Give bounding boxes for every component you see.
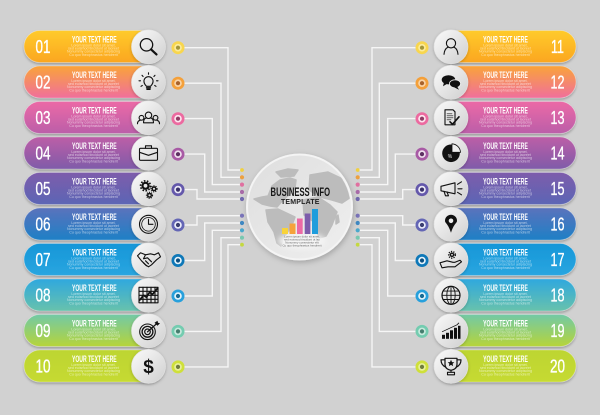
heading 13: YOUR TEXT HERE xyxy=(483,106,528,116)
body 08: Cu quo theophrastus hendrerit xyxy=(69,301,118,305)
body 20: Nonummy consectetur adipiscing xyxy=(479,369,532,373)
icon circle: trophy xyxy=(434,349,468,383)
dot 04 xyxy=(172,148,184,161)
heading 15: YOUR TEXT HERE xyxy=(483,177,528,187)
body 03: sed euismod tincidunt ut laoreet xyxy=(68,118,119,122)
body 05: Cu quo theophrastus hendrerit xyxy=(69,195,118,199)
body 18: sed euismod tincidunt ut laoreet xyxy=(480,295,531,299)
number 09: 09 xyxy=(36,321,50,341)
number 02: 02 xyxy=(36,73,50,93)
body 06: Nonummy consectetur adipiscing xyxy=(67,227,120,231)
icon circle: line chart xyxy=(132,278,166,312)
row 09 xyxy=(24,314,184,348)
number 01: 01 xyxy=(36,37,50,57)
heading 03: YOUR TEXT HERE xyxy=(72,106,117,116)
pill 20 xyxy=(436,350,576,382)
icon circle: dollar xyxy=(132,349,166,383)
body 14: sed euismod tincidunt ut laoreet xyxy=(480,153,531,157)
icon circle: person xyxy=(434,30,468,64)
body 10: Nonummy consectetur adipiscing xyxy=(67,369,120,373)
number 03: 03 xyxy=(36,108,50,128)
row 03 xyxy=(24,101,184,135)
icon circle: handshake xyxy=(132,243,166,277)
row 06 xyxy=(24,207,184,241)
row 18 xyxy=(416,278,576,312)
icon circle: target xyxy=(132,314,166,348)
body 19: Lorem ipsum dolor sit amet, xyxy=(483,327,528,331)
number 17: 17 xyxy=(550,250,564,270)
body 06: Cu quo theophrastus hendrerit xyxy=(69,230,118,234)
body 09: Nonummy consectetur adipiscing xyxy=(67,334,120,338)
body 05: Lorem ipsum dolor sit amet, xyxy=(71,185,116,189)
heading 12: YOUR TEXT HERE xyxy=(483,70,528,80)
body 13: sed euismod tincidunt ut laoreet xyxy=(480,118,531,122)
number 19: 19 xyxy=(550,321,564,341)
dot 10 xyxy=(172,360,184,373)
row 04 xyxy=(24,136,184,170)
body 15: Nonummy consectetur adipiscing xyxy=(479,192,532,196)
center caption: Lorem ipsum dolor sit amet, xyxy=(284,234,320,238)
number 12: 12 xyxy=(550,73,564,93)
body 16: sed euismod tincidunt ut laoreet xyxy=(480,224,531,228)
heading 04: YOUR TEXT HERE xyxy=(72,141,117,151)
pill 18 xyxy=(436,279,576,311)
dot 06 xyxy=(172,218,184,232)
dot 19 xyxy=(416,325,428,338)
dot 13 xyxy=(416,112,428,125)
body 17: Nonummy consectetur adipiscing xyxy=(479,263,532,267)
body 16: Nonummy consectetur adipiscing xyxy=(479,227,532,231)
number 05: 05 xyxy=(36,179,50,199)
heading 06: YOUR TEXT HERE xyxy=(72,212,117,222)
body 13: Nonummy consectetur adipiscing xyxy=(479,121,532,125)
pill 02 xyxy=(24,66,164,98)
row 12 xyxy=(416,65,576,99)
dot 09 xyxy=(172,325,184,338)
body 13: Cu quo theophrastus hendrerit xyxy=(481,124,530,128)
body 03: Nonummy consectetur adipiscing xyxy=(67,121,120,125)
pill 08 xyxy=(24,279,164,311)
body 15: Cu quo theophrastus hendrerit xyxy=(481,195,530,199)
body 19: sed euismod tincidunt ut laoreet xyxy=(480,330,531,334)
number 06: 06 xyxy=(36,215,50,235)
number 08: 08 xyxy=(36,286,50,306)
body 18: Lorem ipsum dolor sit amet, xyxy=(483,292,528,296)
subtitle: TEMPLATE xyxy=(281,199,320,206)
body 11: Nonummy consectetur adipiscing xyxy=(479,50,532,54)
pill 07 xyxy=(24,244,164,276)
row 05 xyxy=(24,172,184,206)
number 11: 11 xyxy=(551,37,564,57)
connector lines: left xyxy=(184,48,241,367)
center caption: Cu quo theophrastus hendrerit xyxy=(282,244,322,248)
body 06: sed euismod tincidunt ut laoreet xyxy=(68,224,119,228)
row 08 xyxy=(24,278,184,312)
pill 09 xyxy=(24,314,164,346)
heading 10: YOUR TEXT HERE xyxy=(72,354,117,364)
icon circle: pie chart: % xyxy=(448,154,453,160)
center caption: Nonummy consectetur elit xyxy=(285,240,319,244)
body 14: Cu quo theophrastus hendrerit xyxy=(481,159,530,163)
number 07: 07 xyxy=(36,250,50,270)
row 17 xyxy=(416,243,576,277)
row 16 xyxy=(416,207,576,241)
body 02: sed euismod tincidunt ut laoreet xyxy=(68,82,119,86)
body 15: sed euismod tincidunt ut laoreet xyxy=(480,188,531,192)
heading 11: YOUR TEXT HERE xyxy=(483,35,528,45)
row 14 xyxy=(416,136,576,170)
body 09: Cu quo theophrastus hendrerit xyxy=(69,337,118,341)
heading 14: YOUR TEXT HERE xyxy=(483,141,528,151)
body 01: Cu quo theophrastus hendrerit xyxy=(69,53,118,57)
dot 14 xyxy=(416,148,428,161)
heading 07: YOUR TEXT HERE xyxy=(72,248,117,258)
number 18: 18 xyxy=(550,286,564,306)
pill 05 xyxy=(24,172,164,204)
body 04: Lorem ipsum dolor sit amet, xyxy=(71,150,116,154)
number 20: 20 xyxy=(550,357,565,377)
number 15: 15 xyxy=(550,179,564,199)
body 18: Cu quo theophrastus hendrerit xyxy=(481,301,530,305)
title: BUSINESS INFO xyxy=(271,185,330,199)
heading 18: YOUR TEXT HERE xyxy=(483,283,528,293)
icon circle: globe xyxy=(434,278,468,312)
world map xyxy=(254,169,351,246)
heading 05: YOUR TEXT HERE xyxy=(72,177,117,187)
body 05: sed euismod tincidunt ut laoreet xyxy=(68,188,119,192)
body 07: sed euismod tincidunt ut laoreet xyxy=(68,260,119,264)
dot 02 xyxy=(172,77,184,90)
body 02: Lorem ipsum dolor sit amet, xyxy=(71,79,116,83)
body 02: Nonummy consectetur adipiscing xyxy=(67,85,120,89)
icon circle: dollar: $ xyxy=(143,357,154,378)
body 07: Lorem ipsum dolor sit amet, xyxy=(71,256,116,260)
body 06: Lorem ipsum dolor sit amet, xyxy=(71,221,116,225)
body 15: Lorem ipsum dolor sit amet, xyxy=(483,185,528,189)
pill 01 xyxy=(24,30,164,62)
heading 19: YOUR TEXT HERE xyxy=(483,319,528,329)
body 19: Nonummy consectetur adipiscing xyxy=(479,334,532,338)
center globe panel xyxy=(247,154,352,260)
connector lines: right xyxy=(359,48,416,367)
number 04: 04 xyxy=(36,144,50,164)
pill 11 xyxy=(436,30,576,62)
small junction dots: left xyxy=(240,168,244,247)
icon circle: gears xyxy=(132,172,166,206)
icon circle: hand with gear xyxy=(434,243,468,277)
body 05: Nonummy consectetur adipiscing xyxy=(67,192,120,196)
dot 11 xyxy=(416,41,428,54)
row 19 xyxy=(416,314,576,348)
body 09: Lorem ipsum dolor sit amet, xyxy=(71,327,116,331)
body 14: Lorem ipsum dolor sit amet, xyxy=(483,150,528,154)
row 20 xyxy=(416,349,576,383)
row 10 xyxy=(24,349,184,383)
body 03: Lorem ipsum dolor sit amet, xyxy=(71,114,116,118)
icon circle: speech bubbles xyxy=(434,65,468,99)
pill 14 xyxy=(436,137,576,169)
pill 13 xyxy=(436,102,576,134)
body 04: sed euismod tincidunt ut laoreet xyxy=(68,153,119,157)
body 12: sed euismod tincidunt ut laoreet xyxy=(480,82,531,86)
row 07 xyxy=(24,243,184,277)
dot 01 xyxy=(172,41,184,54)
pill 17 xyxy=(436,244,576,276)
dot 03 xyxy=(172,112,184,125)
body 04: Nonummy consectetur adipiscing xyxy=(67,156,120,160)
bar chart xyxy=(282,209,318,234)
icon circle: pie chart xyxy=(434,136,468,170)
body 10: Cu quo theophrastus hendrerit xyxy=(69,372,118,376)
pill 10 xyxy=(24,350,164,382)
body 09: sed euismod tincidunt ut laoreet xyxy=(68,330,119,334)
dot 18 xyxy=(416,290,428,302)
icon circle: clock xyxy=(132,207,166,241)
heading 20: YOUR TEXT HERE xyxy=(483,354,528,364)
caption backdrop xyxy=(278,233,326,249)
body 01: sed euismod tincidunt ut laoreet xyxy=(68,46,119,50)
number 10: 10 xyxy=(36,357,50,377)
icon circle: megaphone xyxy=(434,172,468,206)
center caption: sed euismod tincidunt ut lao xyxy=(284,238,320,242)
icon circle: map pin xyxy=(434,207,468,241)
pill 06 xyxy=(24,208,164,240)
dot 17 xyxy=(416,254,428,267)
dot 05 xyxy=(172,183,184,196)
body 20: sed euismod tincidunt ut laoreet xyxy=(480,366,531,370)
body 07: Nonummy consectetur adipiscing xyxy=(67,263,120,267)
heading 02: YOUR TEXT HERE xyxy=(72,70,117,80)
body 11: Cu quo theophrastus hendrerit xyxy=(481,53,530,57)
dot 08 xyxy=(172,290,184,302)
body 01: Lorem ipsum dolor sit amet, xyxy=(71,43,116,47)
heading 08: YOUR TEXT HERE xyxy=(72,283,117,293)
body 11: sed euismod tincidunt ut laoreet xyxy=(480,46,531,50)
body 12: Nonummy consectetur adipiscing xyxy=(479,85,532,89)
icon circle: magnifier xyxy=(132,30,166,64)
body 10: Lorem ipsum dolor sit amet, xyxy=(71,363,116,367)
small junction dots: right xyxy=(356,168,360,247)
body 12: Cu quo theophrastus hendrerit xyxy=(481,88,530,92)
body 01: Nonummy consectetur adipiscing xyxy=(67,50,120,54)
body 16: Lorem ipsum dolor sit amet, xyxy=(483,221,528,225)
body 12: Lorem ipsum dolor sit amet, xyxy=(483,79,528,83)
heading 09: YOUR TEXT HERE xyxy=(72,319,117,329)
body 08: sed euismod tincidunt ut laoreet xyxy=(68,295,119,299)
row 13 xyxy=(416,101,576,135)
number 13: 13 xyxy=(550,108,564,128)
body 04: Cu quo theophrastus hendrerit xyxy=(69,159,118,163)
row 15 xyxy=(416,172,576,206)
pill 04 xyxy=(24,137,164,169)
heading 17: YOUR TEXT HERE xyxy=(483,248,528,258)
dot 12 xyxy=(416,77,428,90)
pill 12 xyxy=(436,66,576,98)
body 17: sed euismod tincidunt ut laoreet xyxy=(480,260,531,264)
heading 01: YOUR TEXT HERE xyxy=(72,35,117,45)
icon circle: team xyxy=(132,101,166,135)
body 20: Lorem ipsum dolor sit amet, xyxy=(483,363,528,367)
icon circle: document with check xyxy=(434,101,468,135)
icon circle: briefcase xyxy=(132,136,166,170)
pill 15 xyxy=(436,172,576,204)
body 20: Cu quo theophrastus hendrerit xyxy=(481,372,530,376)
body 17: Cu quo theophrastus hendrerit xyxy=(481,266,530,270)
body 13: Lorem ipsum dolor sit amet, xyxy=(483,114,528,118)
pill 16 xyxy=(436,208,576,240)
body 17: Lorem ipsum dolor sit amet, xyxy=(483,256,528,260)
body 03: Cu quo theophrastus hendrerit xyxy=(69,124,118,128)
body 07: Cu quo theophrastus hendrerit xyxy=(69,266,118,270)
pill 03 xyxy=(24,102,164,134)
body 18: Nonummy consectetur adipiscing xyxy=(479,298,532,302)
icon circle: light bulb xyxy=(132,65,166,99)
body 10: sed euismod tincidunt ut laoreet xyxy=(68,366,119,370)
body 11: Lorem ipsum dolor sit amet, xyxy=(483,43,528,47)
body 08: Nonummy consectetur adipiscing xyxy=(67,298,120,302)
dot 15 xyxy=(416,183,428,196)
body 19: Cu quo theophrastus hendrerit xyxy=(481,337,530,341)
dot 20 xyxy=(416,360,428,373)
number 14: 14 xyxy=(550,144,564,164)
heading 16: YOUR TEXT HERE xyxy=(483,212,528,222)
row 11 xyxy=(416,30,576,64)
dot 07 xyxy=(172,254,184,267)
pill 19 xyxy=(436,314,576,346)
body 02: Cu quo theophrastus hendrerit xyxy=(69,88,118,92)
body 08: Lorem ipsum dolor sit amet, xyxy=(71,292,116,296)
icon circle: rising bars xyxy=(434,314,468,348)
dot 16 xyxy=(416,218,428,232)
body 16: Cu quo theophrastus hendrerit xyxy=(481,230,530,234)
number 16: 16 xyxy=(550,215,564,235)
body 14: Nonummy consectetur adipiscing xyxy=(479,156,532,160)
row 02 xyxy=(24,65,184,99)
row 01 xyxy=(24,30,184,64)
